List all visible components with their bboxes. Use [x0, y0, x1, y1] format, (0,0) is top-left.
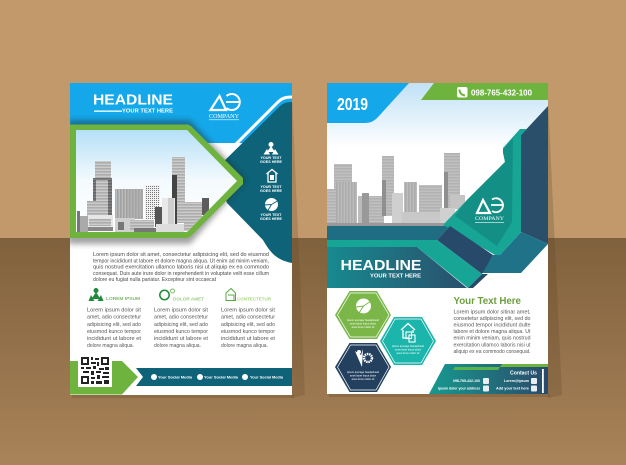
column 1: incididunt ut labore et [87, 336, 141, 342]
picture panel shadow [68, 120, 246, 244]
side icons with captions [260, 142, 282, 221]
contact panel: Add your text here [496, 386, 529, 390]
side icons with captions: GOES HERE [260, 189, 282, 193]
social media bar: Your Social Media [158, 376, 193, 380]
city skyline left [77, 157, 209, 232]
side icons with captions: GOES HERE [260, 217, 282, 221]
inner teal panel [455, 138, 513, 246]
column 1: amet, adio consectetur [87, 314, 141, 320]
teal hexagon: amet laore tinput dulce [395, 348, 422, 352]
contact panel [429, 364, 548, 394]
social media bar [136, 368, 292, 386]
right paragraph [454, 309, 531, 355]
right paragraph: enim minim veniam, quis nostrud [454, 336, 530, 342]
green hexagon: amet lorem dolor sit [352, 325, 375, 329]
navy hexagon: amet laore tinput dulce [350, 374, 377, 378]
side icons with captions: YOUR TEXT [260, 213, 282, 217]
navy diagonal [437, 226, 493, 274]
green hexagon: amet laore tinput dulce [350, 322, 377, 326]
column 3: amet, adio consectetur [221, 314, 275, 320]
lower right block [482, 232, 548, 273]
column 1: dolore magna aliqua. [87, 343, 134, 349]
teal corner panel [215, 102, 292, 263]
column 2: amet, adio consectetur [154, 314, 208, 320]
blue header band [70, 83, 292, 143]
headline: YOUR TEXT HERE [122, 108, 173, 114]
thin navy sliver [468, 274, 488, 288]
navy side panel [521, 106, 548, 244]
right paragraph: aliquip ex ea commodo consequat. [454, 349, 531, 355]
teal hexagon [380, 317, 436, 365]
intro paragraph: consequat. Duis aute irure dolor in reprehenderit in voluptate velit esse cillum [93, 271, 269, 277]
band under skyline [327, 226, 450, 240]
sky [327, 83, 548, 148]
side icons with captions: YOUR TEXT [260, 185, 282, 189]
column 1: adipisicing elit, sed ado [87, 322, 141, 328]
column 2: adipisicing elit, sed ado [154, 322, 208, 328]
right flyer [327, 83, 562, 398]
intro paragraph: quis nostrud exercitation ullamco laboris nisi ut aliquip ex ea commodo [93, 265, 269, 271]
phone banner: 098-765-432-100 [471, 88, 532, 98]
column 2: incididunt ut labore et [154, 336, 208, 342]
social media bar: Your Social Media [204, 376, 239, 380]
headline band: YOUR TEXT HERE [370, 274, 421, 280]
year tab: 2019 [337, 94, 368, 114]
headline: HEADLINE [93, 92, 173, 108]
intro paragraph: dolore eu fugiat nulla pariatur. Excepteur sint occaecat [93, 277, 216, 283]
company logo: COMPANY [209, 114, 240, 120]
column 2: Lorem ipsum dolor sit [154, 308, 208, 314]
white swoosh [220, 97, 292, 160]
social media bar: Your Social Media [250, 376, 284, 380]
navy hexagon [335, 343, 391, 392]
column 1: LOREM IPSUM [106, 296, 140, 302]
contact panel: Lorem@ipsum [504, 379, 529, 383]
right paragraph: labore et dolore magna aliqua. Ut [454, 329, 531, 335]
column 1: Lorem ipsum dolor sit [87, 308, 141, 314]
column 3: incididunt ut labore et [221, 336, 275, 342]
navy hexagon: Ipsum average haedadvesd [347, 370, 380, 374]
column 2 [154, 289, 208, 349]
teal hexagon: Ipsum average haedadvesd [392, 344, 425, 348]
navy hexagon: amet lorem dolor sit [352, 377, 375, 381]
headline band: HEADLINE [340, 257, 422, 274]
left flyer [68, 83, 305, 398]
headline [93, 92, 173, 114]
city skyline right [327, 153, 465, 226]
right paragraph: exercitation ullamco laboris nisi ut [454, 342, 531, 348]
bright teal logo panel [443, 129, 527, 255]
company logo [209, 94, 240, 120]
column 3: eiusmod kunco tempor [221, 329, 275, 335]
right paragraph: Lorem ipsum dolor sitinar amet, [454, 309, 531, 315]
intro paragraph [93, 252, 269, 283]
column 2: eiusmod kunco tempor [154, 329, 208, 335]
contact panel: Ipsum dolor your address [438, 386, 480, 390]
year tab [327, 83, 409, 123]
column 3: dolore magna aliqua. [221, 343, 268, 349]
green footer arrow [70, 361, 138, 394]
green arrow picture frame [70, 124, 243, 238]
column 2: dolore magna aliqua. [154, 343, 201, 349]
teal strip band [327, 240, 482, 288]
column 1 [87, 288, 141, 349]
column 1: eiusmod kunco tempor [87, 329, 141, 335]
intro paragraph: tempor incididunt ut labore et dolore magna aliqua. Ut enim ad minim veniam, [93, 258, 269, 264]
side icons with captions: YOUR TEXT [260, 156, 282, 160]
green hexagon: Ipsum average haedadvesd [347, 318, 380, 322]
contact panel: 098-765-432-100 [453, 379, 480, 383]
side icons with captions: GOES HERE [260, 160, 282, 164]
column 3 [221, 288, 275, 349]
right paragraph: consetetur adipiscing elit, sed do [454, 316, 530, 322]
phone banner [421, 83, 548, 100]
teal hexagon: amet lorem dolor sit [397, 351, 420, 355]
QR code [78, 355, 112, 387]
your text here heading: Your Text Here [454, 296, 522, 307]
green hexagon [335, 291, 391, 339]
column 3: CONTECTETUR [237, 296, 271, 302]
column 3: Lorem ipsum dolor sit [221, 308, 275, 314]
column 3: adipisicing elit, sed ado [221, 322, 275, 328]
column 2: DOLOR AMET [173, 296, 204, 302]
headline band [327, 247, 467, 288]
company logo right [475, 198, 504, 223]
contact panel: Contact Us [510, 370, 537, 376]
company logo right: COMPANY [475, 216, 504, 222]
right paragraph: eiusmod tempor incididunt dulte [454, 323, 530, 329]
intro paragraph: Lorem ipsum dolor sit amet, consectetur adipisicing elit, sed do eiusmod [93, 252, 269, 258]
